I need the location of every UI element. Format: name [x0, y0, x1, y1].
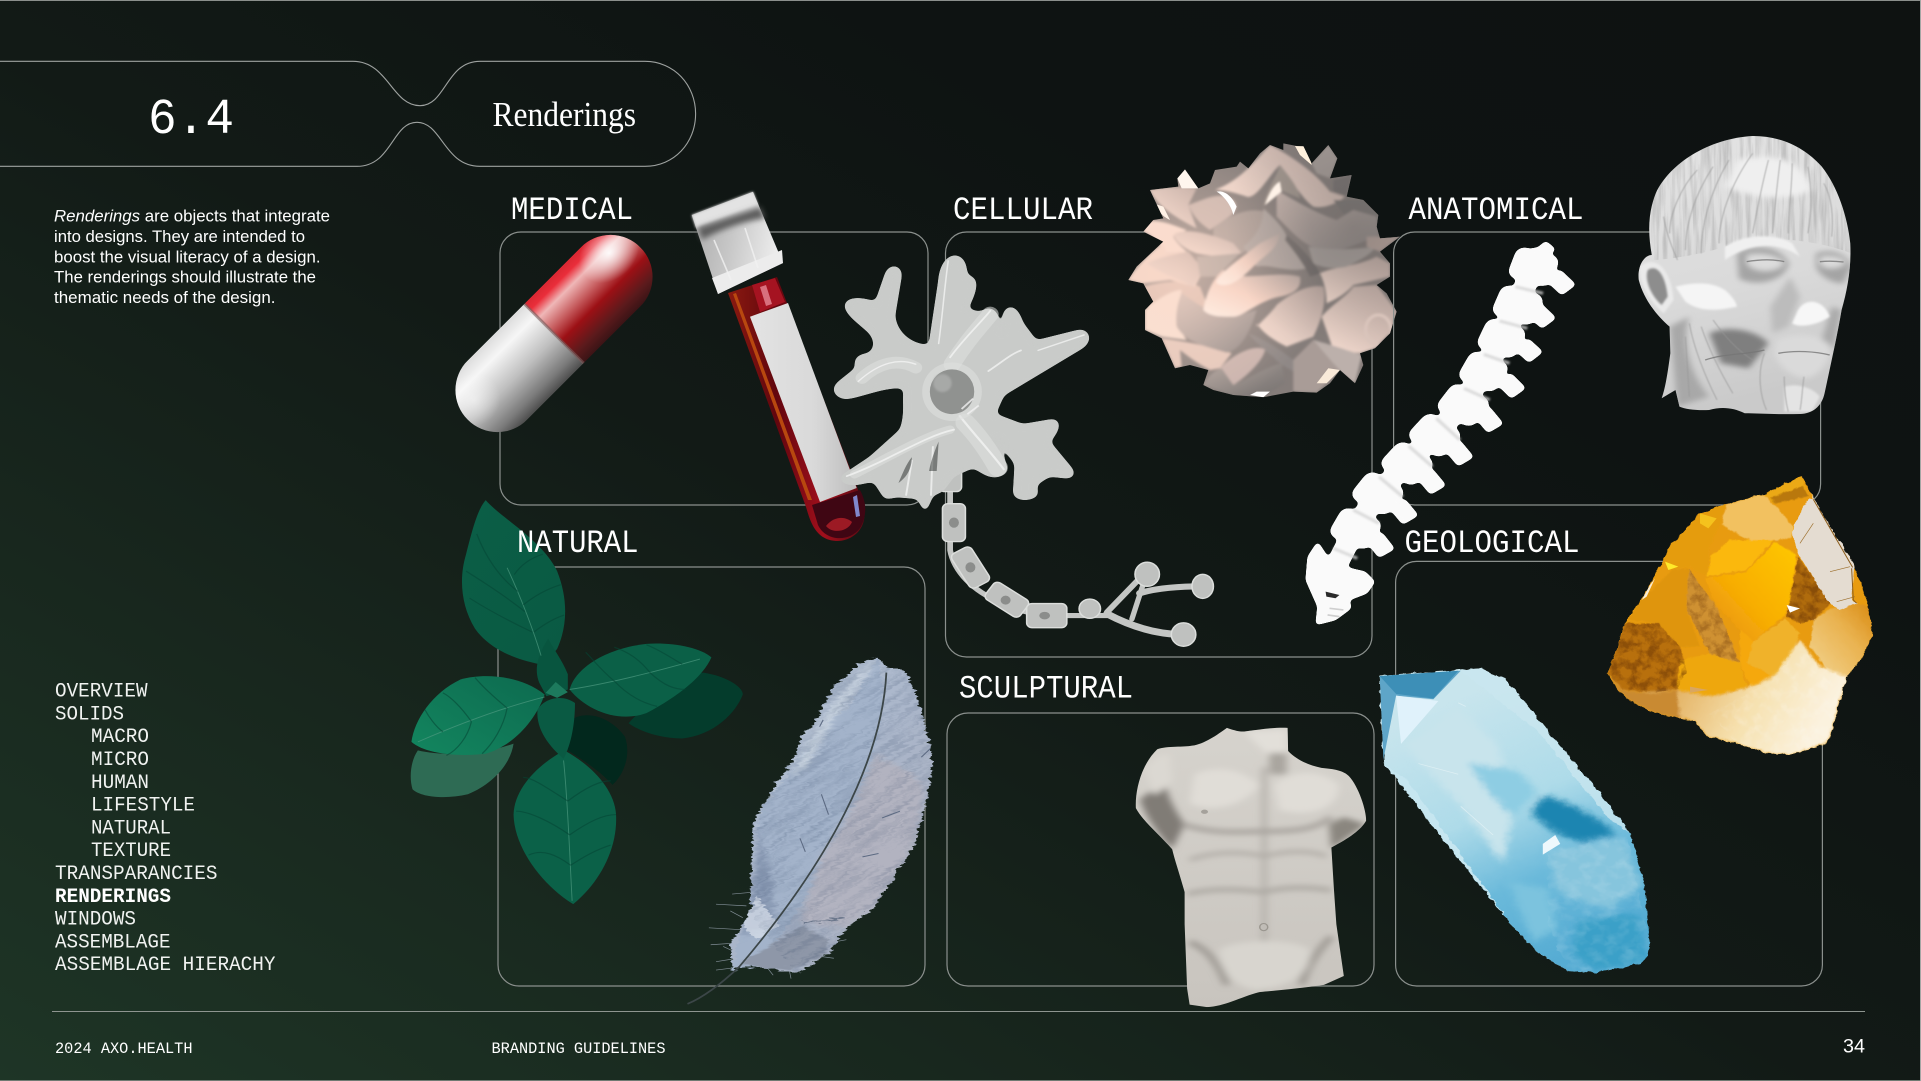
- heading: anatomical: ANATOMICAL: [1408, 192, 1584, 229]
- section number: 6.4: [148, 92, 234, 149]
- icon: translucent neuron: [834, 255, 1213, 646]
- icon: blood test tube: [692, 192, 865, 541]
- footer: [52, 1011, 1865, 1058]
- heading: cellular: CELLULAR: [953, 192, 1093, 229]
- section navigation list: NATURAL: [91, 818, 171, 841]
- section navigation list: RENDERINGS: [55, 886, 171, 909]
- heading: geological: GEOLOGICAL: [1404, 525, 1580, 562]
- intro paragraph: thematic needs of the design.: [54, 289, 276, 307]
- header capsule with section number and title: [0, 61, 696, 166]
- section navigation list: MICRO: [91, 749, 149, 772]
- intro paragraph: into designs. They are intended to: [54, 228, 305, 246]
- panel: geological: [1374, 470, 1880, 986]
- section navigation list: TEXTURE: [91, 840, 171, 863]
- icon: feather: [687, 658, 934, 1004]
- icon: anatomical head: [1634, 133, 1855, 417]
- intro paragraph: Renderings are objects that integrate: [54, 208, 330, 226]
- section title: Renderings: [492, 95, 636, 134]
- heading: sculptural: SCULPTURAL: [959, 671, 1133, 708]
- icon: marble torso: [1130, 724, 1374, 1010]
- icon: spine: [1306, 246, 1569, 625]
- section navigation list: WINDOWS: [55, 909, 136, 932]
- panel: sculptural: [947, 671, 1374, 1010]
- icon: green leaves: [411, 500, 743, 904]
- icon: amber citrine crystal: [1600, 470, 1880, 760]
- heading: natural: NATURAL: [517, 525, 638, 562]
- intro paragraph: The renderings should illustrate the: [54, 269, 316, 287]
- intro paragraph: boost the visual literacy of a design.: [54, 248, 320, 266]
- icon: aquamarine crystal: [1374, 664, 1657, 978]
- panel: natural: [410, 500, 934, 1004]
- section navigation list: [55, 681, 276, 977]
- section navigation list: OVERVIEW: [55, 681, 148, 704]
- section navigation list: TRANSPARANCIES: [55, 863, 218, 886]
- icon: dendritic cell ball: [1123, 137, 1403, 403]
- footer: year and brand: 2024 AXO.HEALTH: [55, 1040, 192, 1058]
- section navigation list: ASSEMBLAGE: [55, 931, 170, 954]
- icon: capsule pill: [455, 234, 653, 432]
- intro paragraph: [54, 208, 330, 307]
- section navigation list: LIFESTYLE: [91, 795, 195, 818]
- section navigation list: SOLIDS: [55, 704, 124, 726]
- panel: anatomical: [1306, 133, 1855, 625]
- panel: medical: [430, 192, 928, 541]
- footer: document name: BRANDING GUIDELINES: [492, 1040, 666, 1058]
- heading: medical: MEDICAL: [511, 192, 633, 229]
- section navigation list: HUMAN: [91, 772, 149, 795]
- section navigation list: MACRO: [91, 726, 149, 749]
- panel: cellular: [834, 137, 1403, 657]
- section navigation list: ASSEMBLAGE HIERACHY: [55, 954, 276, 977]
- footer: page number: 34: [1843, 1036, 1865, 1058]
